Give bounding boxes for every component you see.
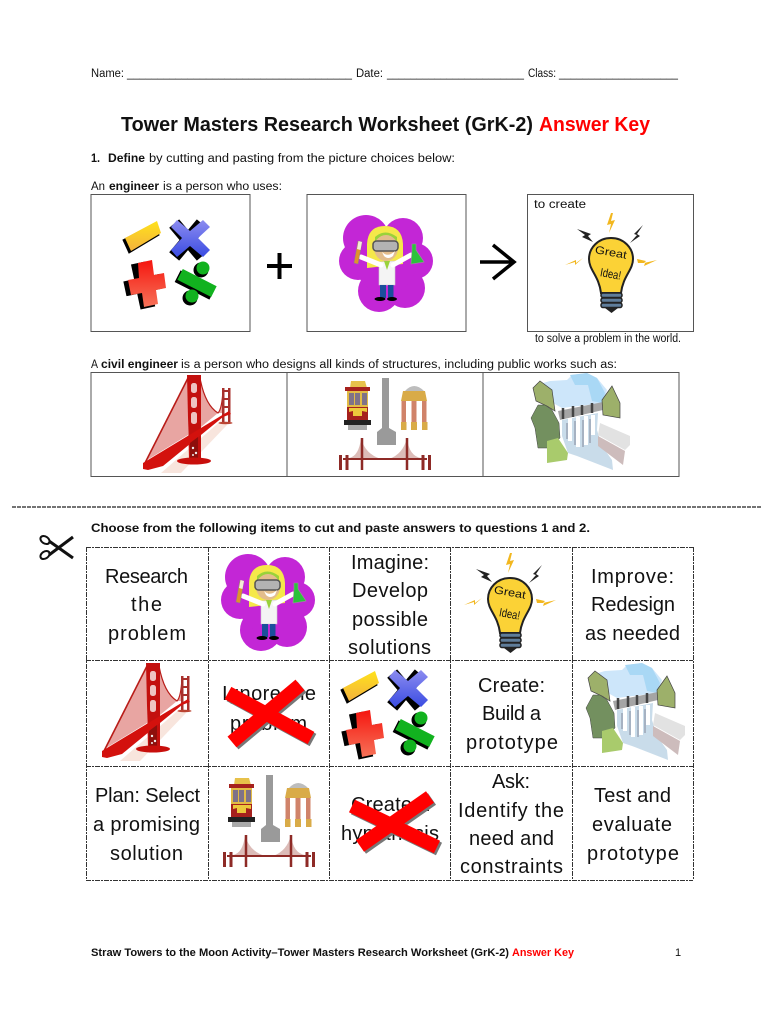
card: research the problem: problem — [108, 623, 186, 645]
question 1 instruction: Define — [108, 153, 145, 165]
name date class line: Date: — [356, 68, 383, 80]
card: ignore the problem crossed out: problem — [230, 713, 307, 735]
card: ask: constraints — [460, 856, 563, 878]
card: great idea bulb: Great — [493, 584, 527, 602]
footer: 1 — [675, 947, 681, 959]
name date class line: _______________________ — [386, 68, 525, 80]
name date class line: _____________________________________ — [126, 68, 353, 80]
card: imagine: solutions — [348, 637, 431, 659]
card: imagine — [348, 552, 431, 659]
card: ask: need and — [469, 828, 554, 850]
engineer definition text: engineer — [109, 181, 160, 193]
card: create build a prototype: Build a — [482, 703, 542, 725]
picture: golden gate bridge — [143, 375, 232, 473]
card: create a hypothesis crossed out: hypothesis — [341, 823, 439, 845]
card: imagine: possible — [352, 609, 428, 631]
card: research the problem — [105, 566, 188, 645]
title: Answer Key — [539, 114, 651, 136]
question 1 instruction: 1. — [91, 153, 100, 165]
card: plan: a promising — [93, 814, 200, 836]
picture: San Francisco landmarks — [340, 378, 430, 470]
card: test and evaluate — [587, 785, 679, 865]
answer box: scientist — [307, 194, 466, 332]
name date class line: Name: — [91, 68, 124, 80]
answer box: great idea bulb: Idea! — [599, 265, 622, 283]
card: ignore the problem crossed out — [222, 683, 316, 744]
card: great idea bulb: Idea! — [498, 605, 521, 623]
card: dam — [586, 663, 685, 760]
card: create a hypothesis crossed out: Create a — [351, 794, 430, 816]
card: great idea bulb — [464, 553, 556, 653]
answer box: great idea bulb — [528, 194, 694, 332]
card: imagine: Develop — [352, 580, 428, 602]
name date class line: Class: — [528, 68, 556, 80]
card: San Francisco landmarks — [224, 775, 314, 867]
question 1 instruction: by cutting and pasting from the picture choices below: — [149, 153, 455, 165]
cut and paste instruction: Choose from the following items to cut and paste answers to questions 1 and 2. — [91, 523, 590, 535]
card: math symbols — [339, 670, 435, 761]
engineer definition text — [91, 181, 282, 193]
footer: Answer Key — [512, 947, 575, 959]
card: research the problem: Research — [105, 566, 188, 588]
name date class line: ____________________ — [558, 68, 679, 80]
card: plan — [93, 785, 200, 865]
card: test and evaluate: Test and — [594, 785, 671, 807]
card: research the problem: the — [131, 594, 162, 616]
card: create build a prototype: Create: — [478, 675, 545, 697]
card: ignore the problem crossed out: Ignore the — [222, 683, 316, 705]
card: improve: Redesign — [591, 594, 675, 616]
card: imagine: Imagine: — [351, 552, 429, 574]
civil engineer definition text: A — [91, 359, 98, 371]
card: ask: Identify the — [458, 800, 564, 822]
arrow — [480, 245, 514, 279]
card: create build a prototype: prototype — [466, 732, 558, 754]
plus sign — [267, 253, 292, 279]
engineer definition text: is a person who uses: — [163, 181, 282, 193]
civil engineer definition text: is a person who designs all kinds of structures, including public works such as: — [181, 359, 617, 371]
card: improve — [585, 566, 680, 645]
answer box: great idea bulb: Great — [594, 244, 628, 262]
engineer definition text: An — [91, 181, 105, 193]
card: plan: Plan: Select — [95, 785, 200, 807]
card: create build a prototype — [466, 675, 558, 754]
card: ask — [458, 771, 564, 878]
cut-out grid — [86, 547, 694, 880]
card: improve: Improve: — [591, 566, 674, 588]
caption: solve a problem: to solve a problem in the world. — [535, 333, 681, 345]
card: ask: Ask: — [492, 771, 530, 793]
card: scientist — [221, 554, 315, 651]
public works table — [91, 372, 679, 476]
answer box: great idea bulb: to create — [534, 199, 586, 211]
name date class line — [91, 68, 679, 80]
icon: scissors — [39, 534, 73, 561]
civil engineer definition text: civil engineer — [101, 359, 179, 371]
card: create a hypothesis crossed out — [341, 794, 439, 849]
card: test and evaluate: prototype — [587, 843, 679, 865]
card: bridge — [102, 663, 192, 761]
card: plan: solution — [110, 843, 183, 865]
card: improve: as needed — [585, 623, 680, 645]
card: test and evaluate: evaluate — [592, 814, 672, 836]
title: Tower Masters Research Worksheet (GrK-2) — [121, 114, 533, 136]
answer box: math symbols — [91, 194, 250, 332]
cut line — [12, 506, 762, 508]
picture: dam — [531, 373, 630, 470]
footer: Straw Towers to the Moon Activity–Tower Masters Research Worksheet (GrK-2) — [91, 947, 509, 959]
